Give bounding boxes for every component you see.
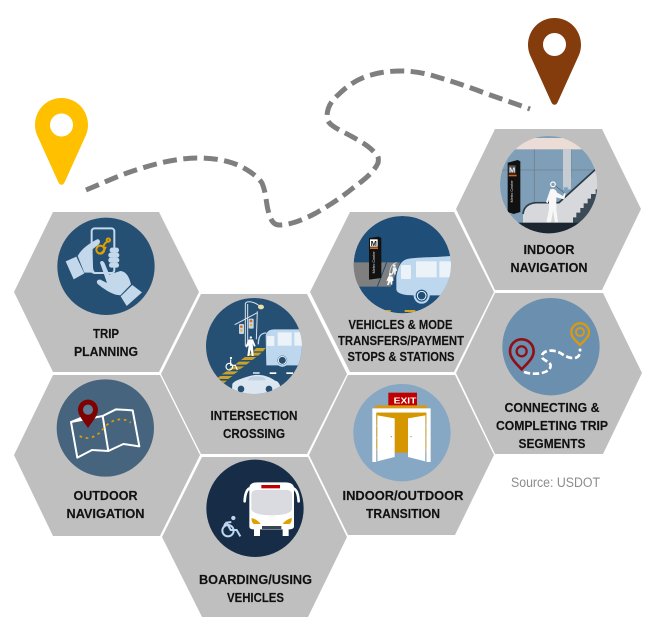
label: BOARDING/USING xyxy=(199,572,312,587)
label: INTERSECTION xyxy=(210,408,298,423)
label: VEHICLES xyxy=(227,590,284,605)
label: NAVIGATION xyxy=(510,260,588,275)
label: INDOOR xyxy=(524,242,574,257)
label: NAVIGATION xyxy=(66,506,144,521)
label: TRANSITION xyxy=(366,506,440,521)
icon: exit doors xyxy=(353,384,451,481)
panel: indoor/outdoor transition xyxy=(309,375,494,535)
panel: outdoor navigation xyxy=(14,375,200,536)
icon: yellow start pin xyxy=(35,98,88,185)
label: SEGMENTS xyxy=(518,436,586,451)
label: CONNECTING & xyxy=(504,400,600,415)
icon: station sign and bus xyxy=(350,216,457,313)
label: CROSSING xyxy=(223,426,285,441)
label: COMPLETING TRIP xyxy=(496,418,608,433)
panel: trip planning xyxy=(14,212,199,372)
label: INDOOR/OUTDOOR xyxy=(342,488,464,503)
icon: brown destination pin xyxy=(528,18,581,105)
icon: escalator and traveler: Metro Center xyxy=(510,179,514,202)
panel: connecting and completing trip segments xyxy=(456,293,642,454)
route: dashed path between pins xyxy=(86,71,530,225)
door frame xyxy=(372,408,431,462)
icon: hands holding phone xyxy=(57,218,155,315)
panel: indoor navigation xyxy=(456,129,641,290)
icon: map with pin xyxy=(57,379,154,477)
panel: intersection crossing xyxy=(161,294,347,454)
label: VEHICLES & MODE xyxy=(348,317,453,332)
panel: vehicles and mode transfers xyxy=(310,212,494,372)
source note: Source: USDOT xyxy=(511,475,600,490)
icon: exit doors: EXIT xyxy=(394,395,416,405)
panel: boarding / using vehicles xyxy=(162,457,347,617)
icon: escalator and traveler xyxy=(500,136,598,234)
label: OUTDOOR xyxy=(74,488,138,503)
icon: two pins with route xyxy=(502,298,600,395)
icon: intersection scene xyxy=(205,297,306,395)
label: STOPS & STATIONS xyxy=(348,349,455,364)
label: PLANNING xyxy=(74,344,138,359)
icon: station sign and bus: Metro Center xyxy=(372,250,376,273)
icon: escalator and traveler: M xyxy=(509,166,515,175)
label: TRANSFERS/PAYMENT xyxy=(338,333,464,348)
icon: station sign and bus: M xyxy=(371,239,377,248)
label: TRIP xyxy=(93,326,119,341)
icon: bus and wheelchair xyxy=(206,460,304,557)
